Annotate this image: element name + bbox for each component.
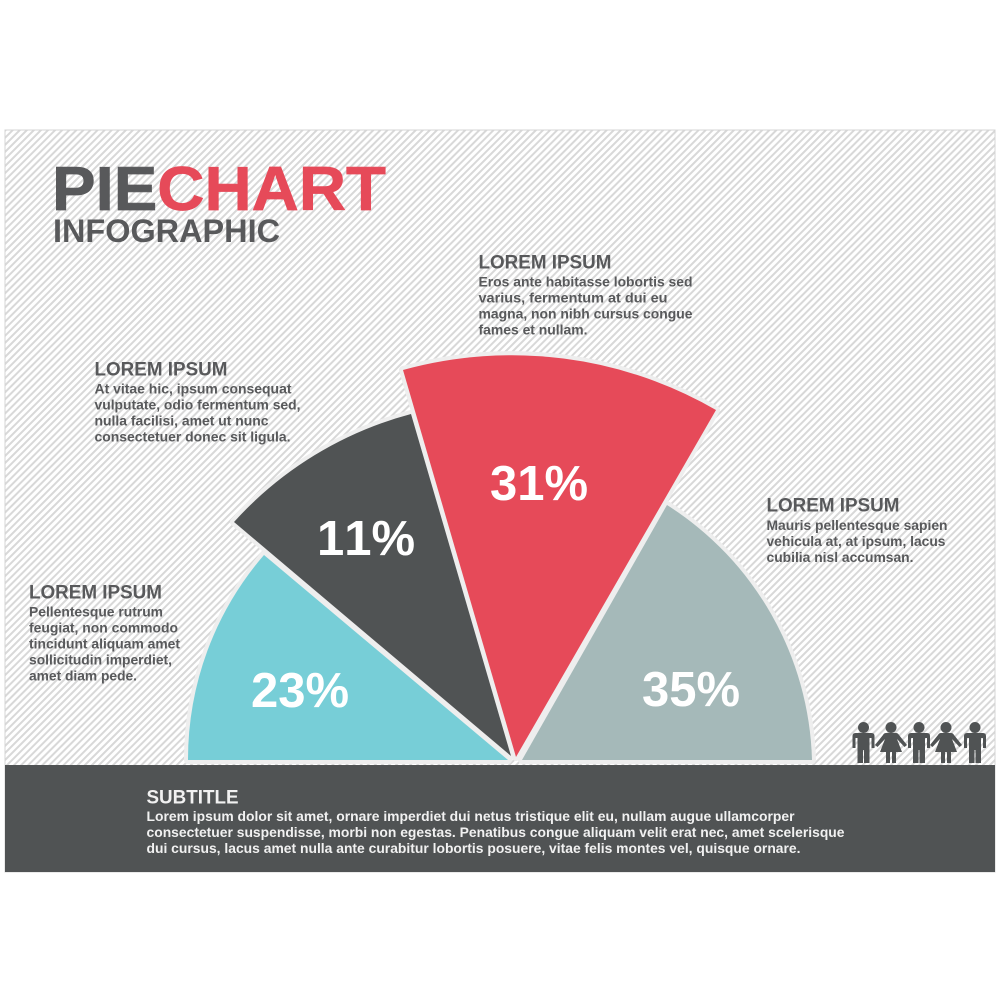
panel: subtitle band: Lorem ipsum dolor sit amet, ornare imperdiet dui netus tristique elit eu, nullam augue ullamcorper — [146, 808, 795, 824]
text block: lower left: sollicitudin imperdiet, — [29, 652, 172, 668]
text block: lower left: LOREM IPSUM — [29, 582, 162, 604]
text block: right: Mauris pellentesque sapien — [766, 517, 948, 533]
icon: man — [908, 722, 930, 763]
text block: lower left — [29, 582, 180, 684]
text block: upper left — [94, 360, 300, 444]
text block: lower left: Pellentesque rutrum — [29, 604, 163, 620]
percent labels: 23% — [251, 664, 349, 718]
text block: upper left: nulla facilisi, amet ut nunc — [94, 412, 269, 428]
icon: people — [852, 722, 986, 763]
slice: 11% dark grey — [234, 414, 511, 756]
text block: lower left: feugiat, non commodo — [29, 620, 178, 636]
slice: 35% grey blue — [522, 505, 812, 760]
slice: 31% red — [403, 355, 716, 757]
panel: subtitle band: dui cursus, lacus amet nulla ante curabitur lobortis posuere, vitae felis montes vel, quisque ornare. — [146, 840, 800, 856]
text block: upper left: At vitae hic, ipsum consequat — [94, 380, 292, 396]
text block: upper left: LOREM IPSUM — [94, 360, 228, 380]
text block: lower left: tincidunt aliquam amet — [29, 636, 180, 652]
text block: top — [478, 252, 693, 338]
text block: top: Eros ante habitasse lobortis sed — [478, 274, 692, 290]
icon: man — [852, 722, 874, 763]
text block: right — [766, 496, 948, 565]
text block: upper left: vulputate, odio fermentum sed, — [94, 396, 300, 412]
title: INFOGRAPHIC — [53, 213, 280, 249]
text block: top: LOREM IPSUM — [478, 252, 612, 274]
percent labels: 11% — [317, 512, 415, 566]
text block: top: varius, fermentum at dui eu — [478, 290, 668, 306]
icon: woman — [930, 722, 962, 763]
panel: subtitle band — [5, 765, 995, 872]
text block: right: vehicula at, at ipsum, lacus — [766, 533, 946, 549]
percent labels: 35% — [642, 663, 740, 717]
slice: 23% teal — [188, 555, 508, 760]
text block: lower left: amet diam pede. — [29, 668, 137, 684]
text block: upper left: consectetuer donec sit ligula. — [94, 428, 290, 444]
panel: striped background — [5, 130, 995, 872]
panel: subtitle band: SUBTITLE — [146, 788, 238, 808]
title: PIECHART — [52, 155, 386, 224]
pie chart — [188, 355, 812, 760]
panel: subtitle band: consectetuer suspendisse, morbi non egestas. Penatibus congue aliquam velit erat nec, amet scelerisque — [146, 824, 845, 840]
percent labels — [251, 457, 740, 718]
text block: top: fames et nullam. — [478, 322, 588, 338]
text block: top: magna, non nibh cursus congue — [478, 306, 693, 322]
text block: right: LOREM IPSUM — [766, 496, 900, 516]
icon: man — [964, 722, 986, 763]
icon: woman — [875, 722, 907, 763]
text block: right: cubilia nisl accumsan. — [766, 549, 914, 565]
percent labels: 31% — [490, 457, 588, 511]
